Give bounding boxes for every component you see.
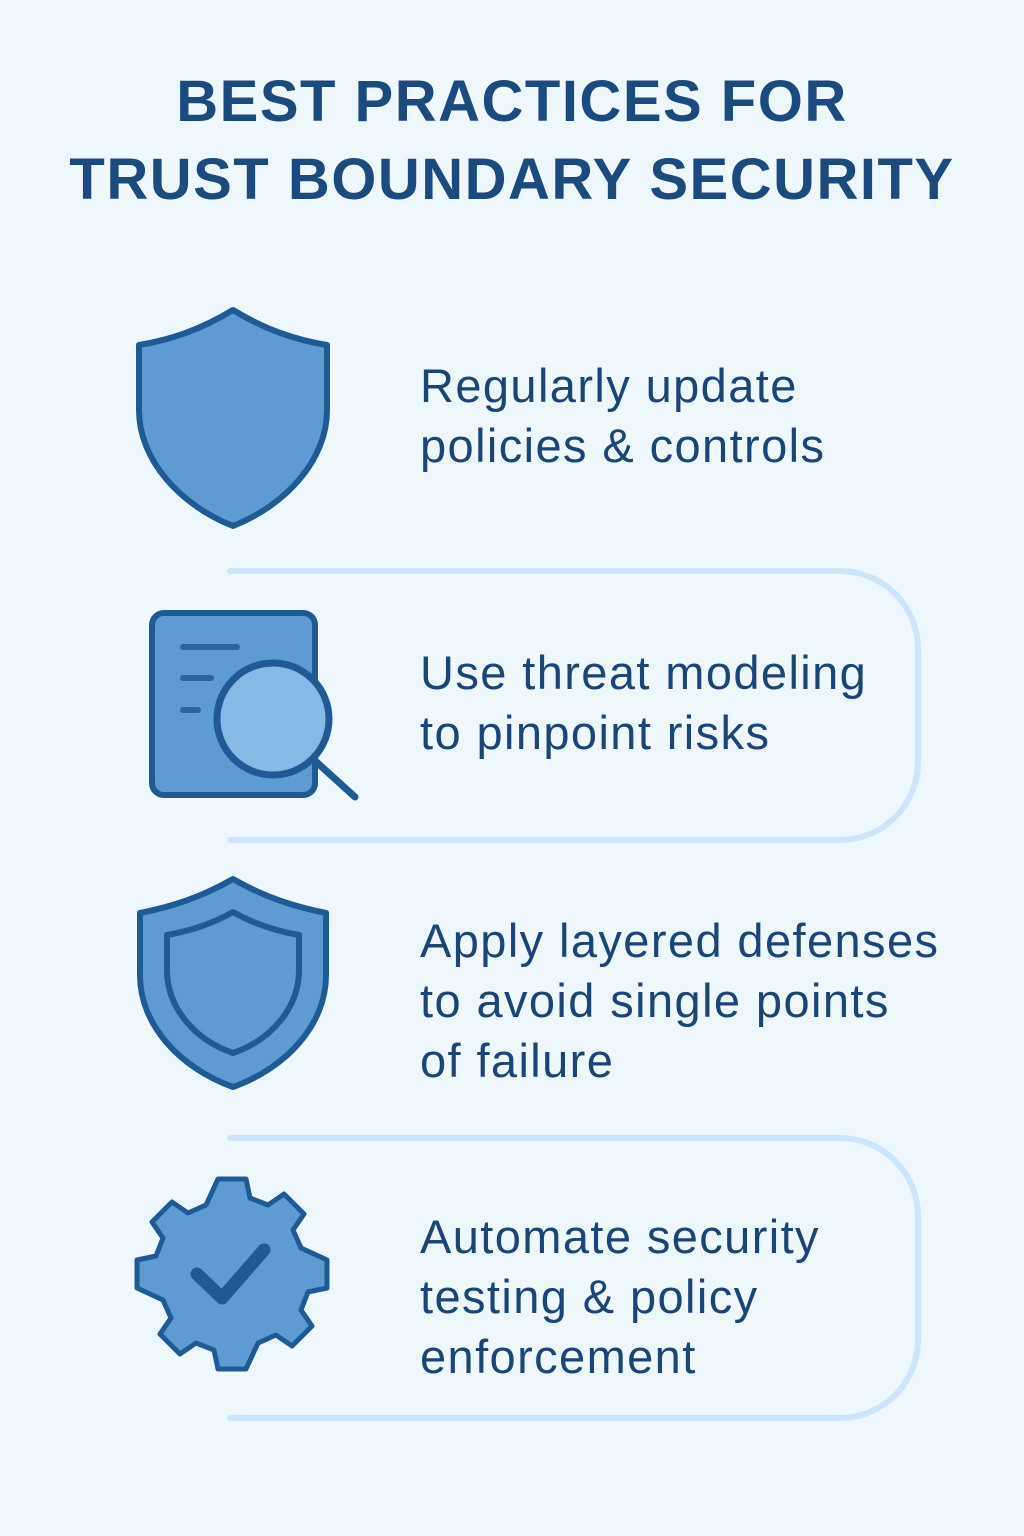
icon: layered shield	[140, 879, 326, 1087]
text: row 4	[420, 1210, 820, 1383]
text: row 4: enforcement	[420, 1330, 697, 1383]
text: row 2	[420, 646, 867, 759]
text: row 2: to pinpoint risks	[420, 706, 770, 759]
icon: shield	[139, 310, 327, 526]
bracket: row 2	[230, 571, 918, 840]
title	[69, 69, 955, 212]
bracket: row 4	[230, 1138, 918, 1418]
text: row 1	[420, 359, 825, 472]
text: row 4: Automate security	[420, 1210, 820, 1263]
text: row 2: Use threat modeling	[420, 646, 867, 699]
text: row 3: to avoid single points	[420, 974, 890, 1027]
title: BEST PRACTICES FOR	[176, 69, 848, 134]
text: row 3: of failure	[420, 1034, 614, 1087]
title: TRUST BOUNDARY SECURITY	[69, 147, 955, 212]
text: row 3	[420, 914, 939, 1087]
text: row 1: Regularly update	[420, 359, 798, 412]
icon: gear with check	[137, 1179, 327, 1369]
text: row 1: policies & controls	[420, 419, 825, 472]
text: row 4: testing & policy	[420, 1270, 759, 1323]
icon: document with magnifier	[152, 613, 355, 797]
text: row 3: Apply layered defenses	[420, 914, 939, 967]
